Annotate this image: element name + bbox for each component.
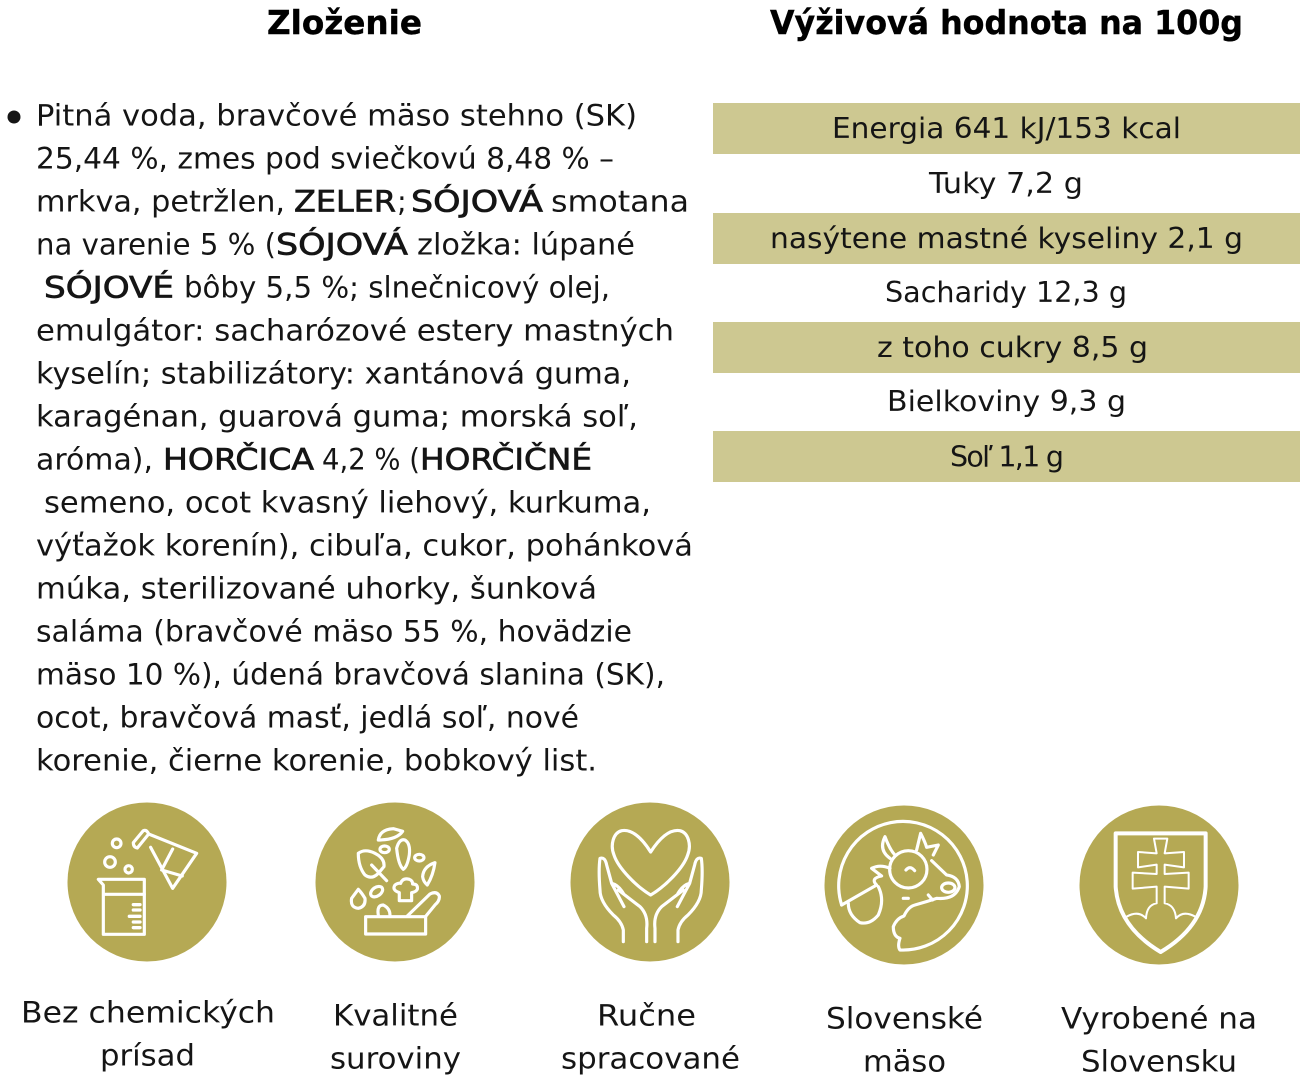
ingredients text block: smotana	[551, 184, 689, 218]
ingredients text block: bôby 5,5 %; slnečnicový olej,	[184, 270, 610, 304]
icon: Slovak coat of arms shield	[1080, 806, 1238, 964]
row: fats: Tuky 7,2 g	[928, 167, 1083, 200]
row: saturated fatty acids: nasýtene mastné kyseliny 2,1 g	[770, 222, 1243, 255]
ingredients text block: mrkva, petržlen,	[36, 184, 285, 218]
ingredients text block: kyselín; stabilizátory: xantánová guma,	[36, 356, 631, 390]
ingredients text block: ZELER	[294, 184, 396, 218]
ingredients text block: ;	[397, 184, 407, 218]
ingredients text block: karagénan, guarová guma; morská soľ,	[36, 400, 638, 434]
row: carbohydrates: Sacharidy 12,3 g	[885, 276, 1127, 309]
icon: Slovak meat, cow in circle	[824, 806, 984, 964]
ingredients text block: výťažok korenín), cibuľa, cukor, pohánková	[36, 528, 693, 562]
label: no chemical additives: prísad	[100, 1038, 195, 1072]
ingredients text block	[36, 98, 693, 778]
ingredients text block: zložka: lúpané	[417, 228, 635, 262]
bullet	[8, 110, 20, 124]
ingredients text block: múka, sterilizované uhorky, šunková	[36, 572, 597, 606]
heading: nutrition value: Výživová hodnota na 100g	[770, 3, 1243, 42]
ingredients text block: 4,2 % (	[322, 442, 420, 476]
label: Slovak meat	[826, 1002, 983, 1078]
row: sugars: z toho cukry 8,5 g	[877, 331, 1148, 364]
ingredients text block: na varenie 5 % (	[36, 228, 276, 262]
label: hand processed	[561, 998, 740, 1076]
ingredients text block: 25,44 %, zmes pod sviečkovú 8,48 % –	[36, 142, 614, 176]
row: protein: Bielkoviny 9,3 g	[887, 385, 1126, 418]
row: saturated fatty acids	[713, 213, 1300, 264]
label: quality ingredients: suroviny	[330, 1042, 461, 1076]
row: energy: Energia 641 kJ/153 kcal	[832, 112, 1181, 145]
ingredients text block: emulgátor: sacharózové estery mastných	[36, 314, 674, 348]
label: hand processed: Ručne	[597, 998, 696, 1032]
label: Slovak meat: mäso	[863, 1044, 946, 1078]
label: quality ingredients	[330, 998, 461, 1076]
ingredients text block: mäso 10 %), údená bravčová slanina (SK),	[36, 658, 665, 692]
icon: hands holding heart	[570, 802, 730, 962]
row: salt	[713, 431, 1300, 482]
row: salt: Soľ 1,1 g	[950, 440, 1062, 474]
ingredients text block: semeno, ocot kvasný liehový, kurkuma,	[44, 486, 651, 520]
label: made in Slovakia: Slovensku	[1081, 1044, 1237, 1078]
ingredients text block: Pitná voda, bravčové mäso stehno (SK)	[36, 98, 637, 132]
ingredients text block: HORČICA	[163, 442, 314, 476]
ingredients text block: ocot, bravčová masť, jedlá soľ, nové	[36, 700, 579, 734]
label: made in Slovakia	[1061, 1002, 1257, 1078]
label: Slovak meat: Slovenské	[826, 1002, 983, 1036]
label: no chemical additives: Bez chemických	[21, 996, 275, 1030]
ingredients text block: SÓJOVÉ	[44, 270, 174, 304]
panel: ingredients list	[8, 98, 693, 778]
heading: Zloženie: Zloženie	[267, 3, 422, 42]
ingredients text block: korenie, čierne korenie, bobkový list.	[36, 744, 597, 778]
label: quality ingredients: Kvalitné	[333, 998, 458, 1032]
label: hand processed: spracované	[561, 1042, 740, 1076]
panel: nutrition table	[713, 103, 1300, 482]
ingredients text block: SÓJOVÁ	[276, 228, 408, 262]
ingredients text block: aróma),	[36, 442, 153, 476]
label: made in Slovakia: Vyrobené na	[1061, 1002, 1257, 1036]
ingredients text block: saláma (bravčové mäso 55 %, hovädzie	[36, 614, 632, 648]
ingredients text block: HORČIČNÉ	[420, 442, 592, 476]
icon: laboratory beaker and flask	[68, 802, 226, 962]
icon: quality vegetables	[316, 802, 474, 962]
row: energy	[713, 103, 1300, 154]
row: sugars	[713, 322, 1300, 373]
label: no chemical additives	[21, 996, 275, 1072]
ingredients text block: SÓJOVÁ	[411, 184, 543, 218]
